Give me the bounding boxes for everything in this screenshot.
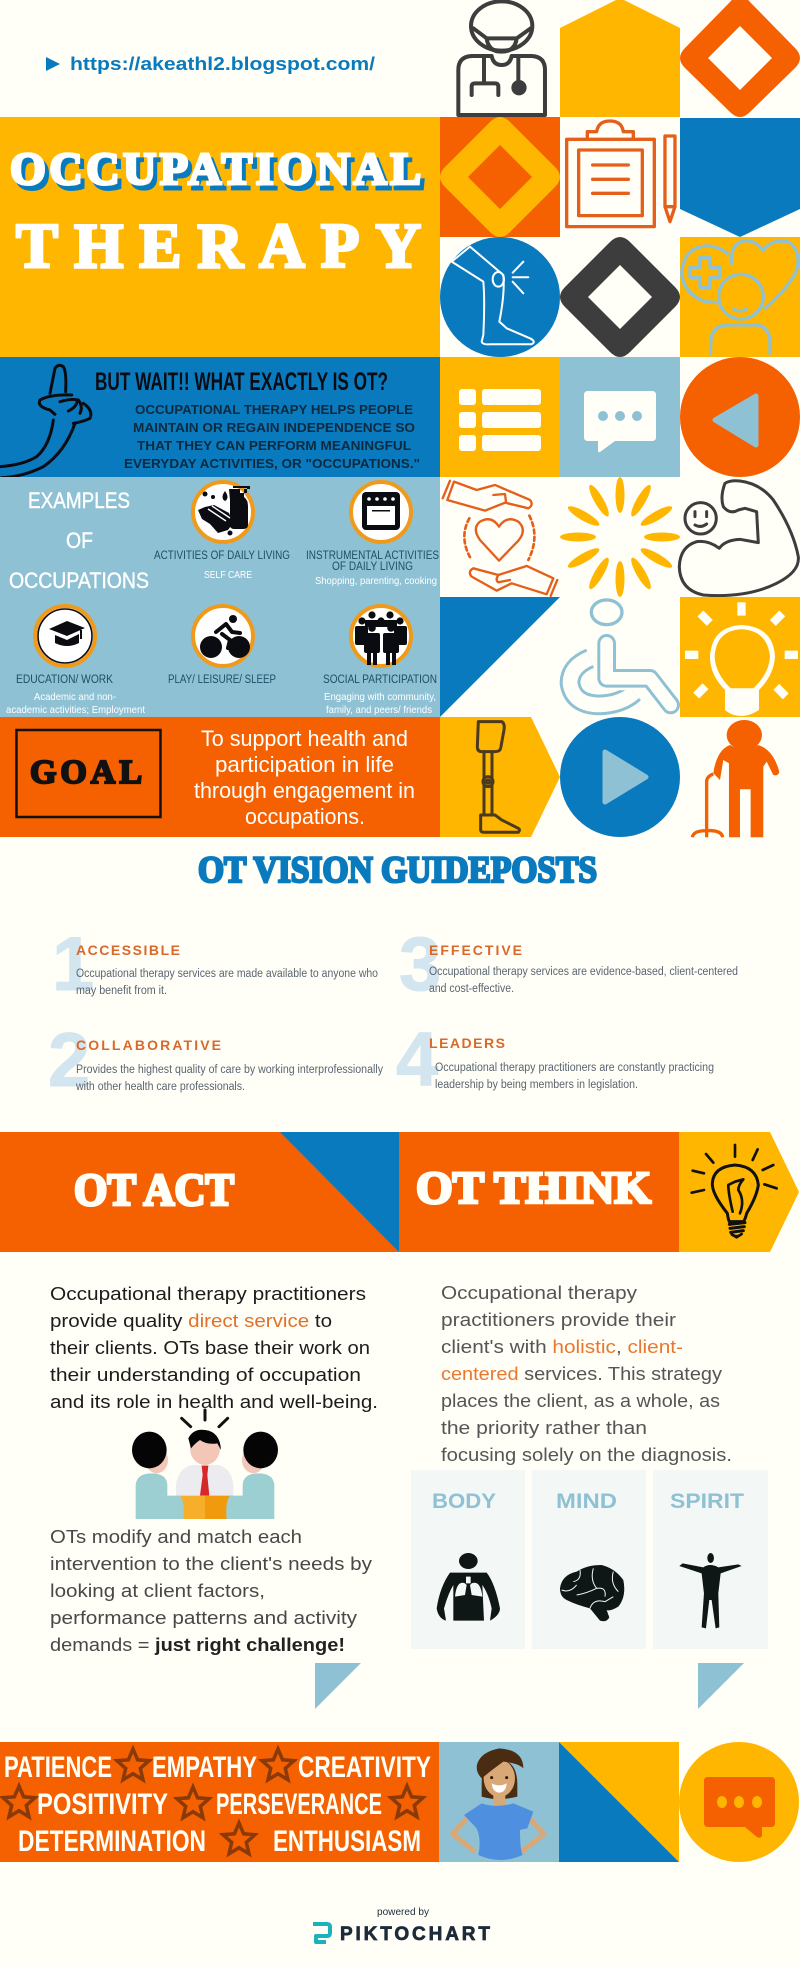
- guidepost 1: accessible: may benefit from it.: [76, 985, 167, 997]
- icon: wheelchair: [570, 600, 671, 705]
- icon: back button: [680, 357, 800, 477]
- heading: but wait: BUT WAIT!! WHAT EXACTLY IS OT?: [95, 368, 388, 396]
- banner: OT think: [399, 1132, 799, 1252]
- text: OT think paragraph: the priority rather than: [441, 1418, 647, 1438]
- label: second row: PLAY/ LEISURE/ SLEEP: [168, 674, 276, 686]
- title: therapy: THERAPY: [16, 211, 421, 281]
- text: OT think paragraph: practitioners provide their: [441, 1310, 676, 1330]
- words: qualities: CREATIVITY: [298, 1751, 431, 1784]
- label: self care and examples: SELF CARE: [204, 569, 252, 581]
- text: OT act paragraph 2: [50, 1527, 372, 1655]
- illustration: smiling woman: [439, 1742, 559, 1862]
- icon: knee pain: [440, 237, 560, 357]
- guidepost 2: collaborative: Provides the highest quality of care by working interprofessionally: [76, 1064, 383, 1076]
- icon: cyclist: [193, 606, 253, 666]
- icon: piktochart logo: [313, 1924, 330, 1942]
- text: OT definition: THAT THEY CAN PERFORM MEANINGFUL: [137, 438, 411, 453]
- text: goal statement: [194, 726, 415, 829]
- footer: powered by piktochart: [313, 1906, 490, 1945]
- icon: caring hands and heart: [443, 481, 557, 596]
- text: OT think paragraph: focusing solely on the diagnosis.: [441, 1445, 732, 1465]
- guidepost 4: leaders: leadership by being members in legislation.: [435, 1079, 638, 1091]
- label: second row: EDUCATION/ WORK: [16, 674, 113, 686]
- banner: OT act: [0, 1132, 399, 1252]
- guidepost 1: accessible: ACCESSIBLE: [76, 942, 180, 958]
- label: activities of daily living: [154, 550, 439, 573]
- guidepost 3: effective: and cost-effective.: [429, 983, 514, 995]
- text: OT act paragraph 1: their clients. OTs base their work on: [50, 1338, 370, 1358]
- card: mind: MIND: [556, 1490, 617, 1513]
- icon: human figure: [679, 1553, 742, 1628]
- guidepost 3: effective: EFFECTIVE: [429, 942, 522, 958]
- text: OT definition: MAINTAIN OR REGAIN INDEPENDENCE SO: [133, 420, 415, 435]
- text: OT act paragraph 2: looking at client factors,: [50, 1581, 265, 1601]
- label: activities of daily living: INSTRUMENTAL ACTIVITIES: [306, 550, 439, 562]
- text: OT think paragraph: places the client, as a whole, as: [441, 1391, 720, 1411]
- text: OT act paragraph 1: and its role in health and well-being.: [50, 1392, 378, 1412]
- heading: examples of occupations: EXAMPLES: [28, 488, 130, 513]
- text: OT definition: OCCUPATIONAL THERAPY HELPS PEOPLE: [135, 402, 413, 417]
- block: orange square with yellow diamond: [440, 117, 560, 237]
- label: activities of daily living: ACTIVITIES OF DAILY LIVING: [154, 550, 290, 562]
- goal box: GOAL: [30, 754, 142, 791]
- guidepost 1: accessible: Occupational therapy services are made available to anyone who: [76, 968, 378, 980]
- icon: dark diamond: [560, 237, 680, 357]
- text: OT act paragraph 1: their understanding of occupation: [50, 1365, 361, 1385]
- icon: blue triangle: [440, 597, 560, 717]
- guidepost 1: accessible: [52, 922, 378, 1007]
- icon: graduation cap: [35, 606, 95, 666]
- text: OT act paragraph 1: provide quality direct service to: [50, 1311, 332, 1331]
- icon: elderly person with cane: [692, 720, 779, 837]
- words: qualities: DETERMINATION: [18, 1825, 206, 1858]
- icon: small triangle right: [698, 1663, 744, 1709]
- link: blog url: https://akeathl2.blogspot.com/: [70, 54, 375, 74]
- heading: examples of occupations: [9, 488, 149, 593]
- card: spirit: [653, 1470, 768, 1649]
- icon: list: [440, 357, 560, 477]
- words: qualities: PERSEVERANCE: [216, 1788, 382, 1821]
- guidepost 2: collaborative: [48, 1018, 383, 1103]
- label: second row examples: Academic and non-: [34, 691, 116, 703]
- words: qualities: [4, 1751, 431, 1858]
- text: goal statement: participation in life: [215, 752, 394, 777]
- guidepost 4: leaders: 4: [396, 1017, 438, 1102]
- text: OT think paragraph: client's with holistic , client-: [441, 1337, 683, 1357]
- label: second row: SOCIAL PARTICIPATION: [323, 674, 437, 686]
- words: qualities: POSITIVITY: [37, 1788, 168, 1821]
- text: OT think paragraph: Occupational therapy: [441, 1283, 637, 1303]
- icon: orange diamond: [680, 0, 800, 117]
- text: OT act paragraph 2: OTs modify and match each: [50, 1527, 302, 1547]
- panel: qualities: [0, 1742, 439, 1862]
- icon: clipboard and pencil: [567, 121, 675, 227]
- label: second row examples: academic activities; Employment: [6, 704, 145, 716]
- card: spirit: SPIRIT: [670, 1490, 744, 1513]
- guidepost 2: collaborative: COLLABORATIVE: [76, 1037, 221, 1053]
- guidepost 2: collaborative: 2: [48, 1018, 90, 1103]
- words: qualities: ENTHUSIASM: [273, 1825, 421, 1858]
- text: OT act paragraph 1: Occupational therapy practitioners: [50, 1284, 366, 1304]
- icon: play button: [560, 717, 680, 837]
- card: body: BODY: [432, 1490, 496, 1513]
- footer: powered by piktochart: powered by: [377, 1906, 430, 1918]
- icon: yellow house block: [560, 0, 680, 117]
- text: OT act paragraph 2: demands = just right challenge!: [50, 1635, 345, 1655]
- guidepost 2: collaborative: with other health care professionals.: [75, 1081, 245, 1093]
- text: OT think paragraph: centered services. This strategy: [441, 1364, 722, 1384]
- icon: health care person: [680, 237, 800, 357]
- icon: yellow burst: [560, 477, 680, 597]
- words: qualities: EMPATHY: [152, 1751, 257, 1784]
- guidepost 4: leaders: Occupational therapy practitioners are constantly practicing: [435, 1062, 714, 1074]
- text: OT definition: EVERYDAY ACTIVITIES, OR "OCCUPATIONS.": [124, 456, 420, 471]
- illustration: three people meeting: [132, 1410, 278, 1519]
- label: second row examples: Engaging with community,: [324, 691, 436, 703]
- text: OT think paragraph: [441, 1283, 732, 1465]
- icon: orange chat on yellow circle: [679, 1742, 799, 1862]
- icon: brain: [560, 1565, 624, 1621]
- banner: OT act: OT ACT: [74, 1165, 234, 1215]
- label: self care and examples: Shopping, parenting, cooking: [315, 575, 437, 587]
- icon: prosthetic leg: [440, 717, 560, 837]
- icon: flexed arm with smiley: [679, 481, 798, 596]
- icon: oven: [351, 482, 411, 542]
- panel: examples of occupations: [0, 477, 440, 717]
- guidepost 3: effective: Occupational therapy services are evidence-based, client-centered: [429, 966, 738, 978]
- text: OT act paragraph 1: [50, 1284, 378, 1412]
- icon: torso with lungs: [437, 1553, 500, 1621]
- panel: what is OT: [0, 357, 440, 478]
- goal box: [16, 730, 160, 817]
- text: goal statement: through engagement in: [194, 778, 415, 803]
- heading: OT vision guideposts: OT VISION GUIDEPOSTS: [198, 850, 597, 891]
- text: OT definition: [124, 402, 420, 471]
- label: second row: [16, 674, 437, 686]
- card: mind: [532, 1470, 646, 1649]
- guidepost 3: effective: 3: [399, 922, 441, 1007]
- block: blue and yellow triangles: [559, 1742, 679, 1862]
- icon: small triangle left: [315, 1663, 361, 1709]
- icon: hand washing: [193, 482, 253, 542]
- heading: examples of occupations: OCCUPATIONS: [9, 568, 149, 593]
- guidepost 4: leaders: LEADERS: [429, 1035, 505, 1051]
- guidepost 1: accessible: 1: [52, 922, 94, 1007]
- title: occupational: OCCUPATIONAL: [14, 148, 425, 199]
- icon: blue shield: [680, 118, 800, 237]
- icon: stars: [3, 1749, 423, 1854]
- icon: lightbulb block: [680, 597, 800, 717]
- label: activities of daily living: OF DAILY LIVING: [332, 561, 413, 573]
- banner: OT think: OT THINK: [416, 1163, 651, 1213]
- card: body: [411, 1470, 525, 1649]
- icon: sketched lightbulb: [692, 1145, 777, 1237]
- title: occupational: OCCUPATIONAL: [10, 143, 421, 194]
- text: goal statement: To support health and: [201, 726, 408, 751]
- words: qualities: PATIENCE: [4, 1751, 112, 1784]
- heading: examples of occupations: OF: [66, 528, 93, 553]
- label: self care and examples: [204, 569, 437, 587]
- text: OT act paragraph 2: performance patterns and activity: [50, 1608, 357, 1628]
- icon: group of people: [351, 606, 411, 666]
- guidepost 3: effective: [399, 922, 738, 1007]
- text: OT act paragraph 2: intervention to the client's needs by: [50, 1554, 372, 1574]
- label: second row examples: [6, 691, 436, 716]
- guidepost 4: leaders: [396, 1017, 714, 1102]
- panel: title: [0, 117, 440, 357]
- label: second row examples: family, and peers/ friends: [326, 704, 432, 716]
- panel: goal: [0, 717, 440, 837]
- icon: speech bubble: [560, 357, 680, 477]
- text: goal statement: occupations.: [245, 804, 365, 829]
- icon: doctor: [458, 1, 545, 115]
- footer: powered by piktochart: PIKTOCHART: [340, 1924, 490, 1945]
- icon: pointing hand: [0, 365, 91, 478]
